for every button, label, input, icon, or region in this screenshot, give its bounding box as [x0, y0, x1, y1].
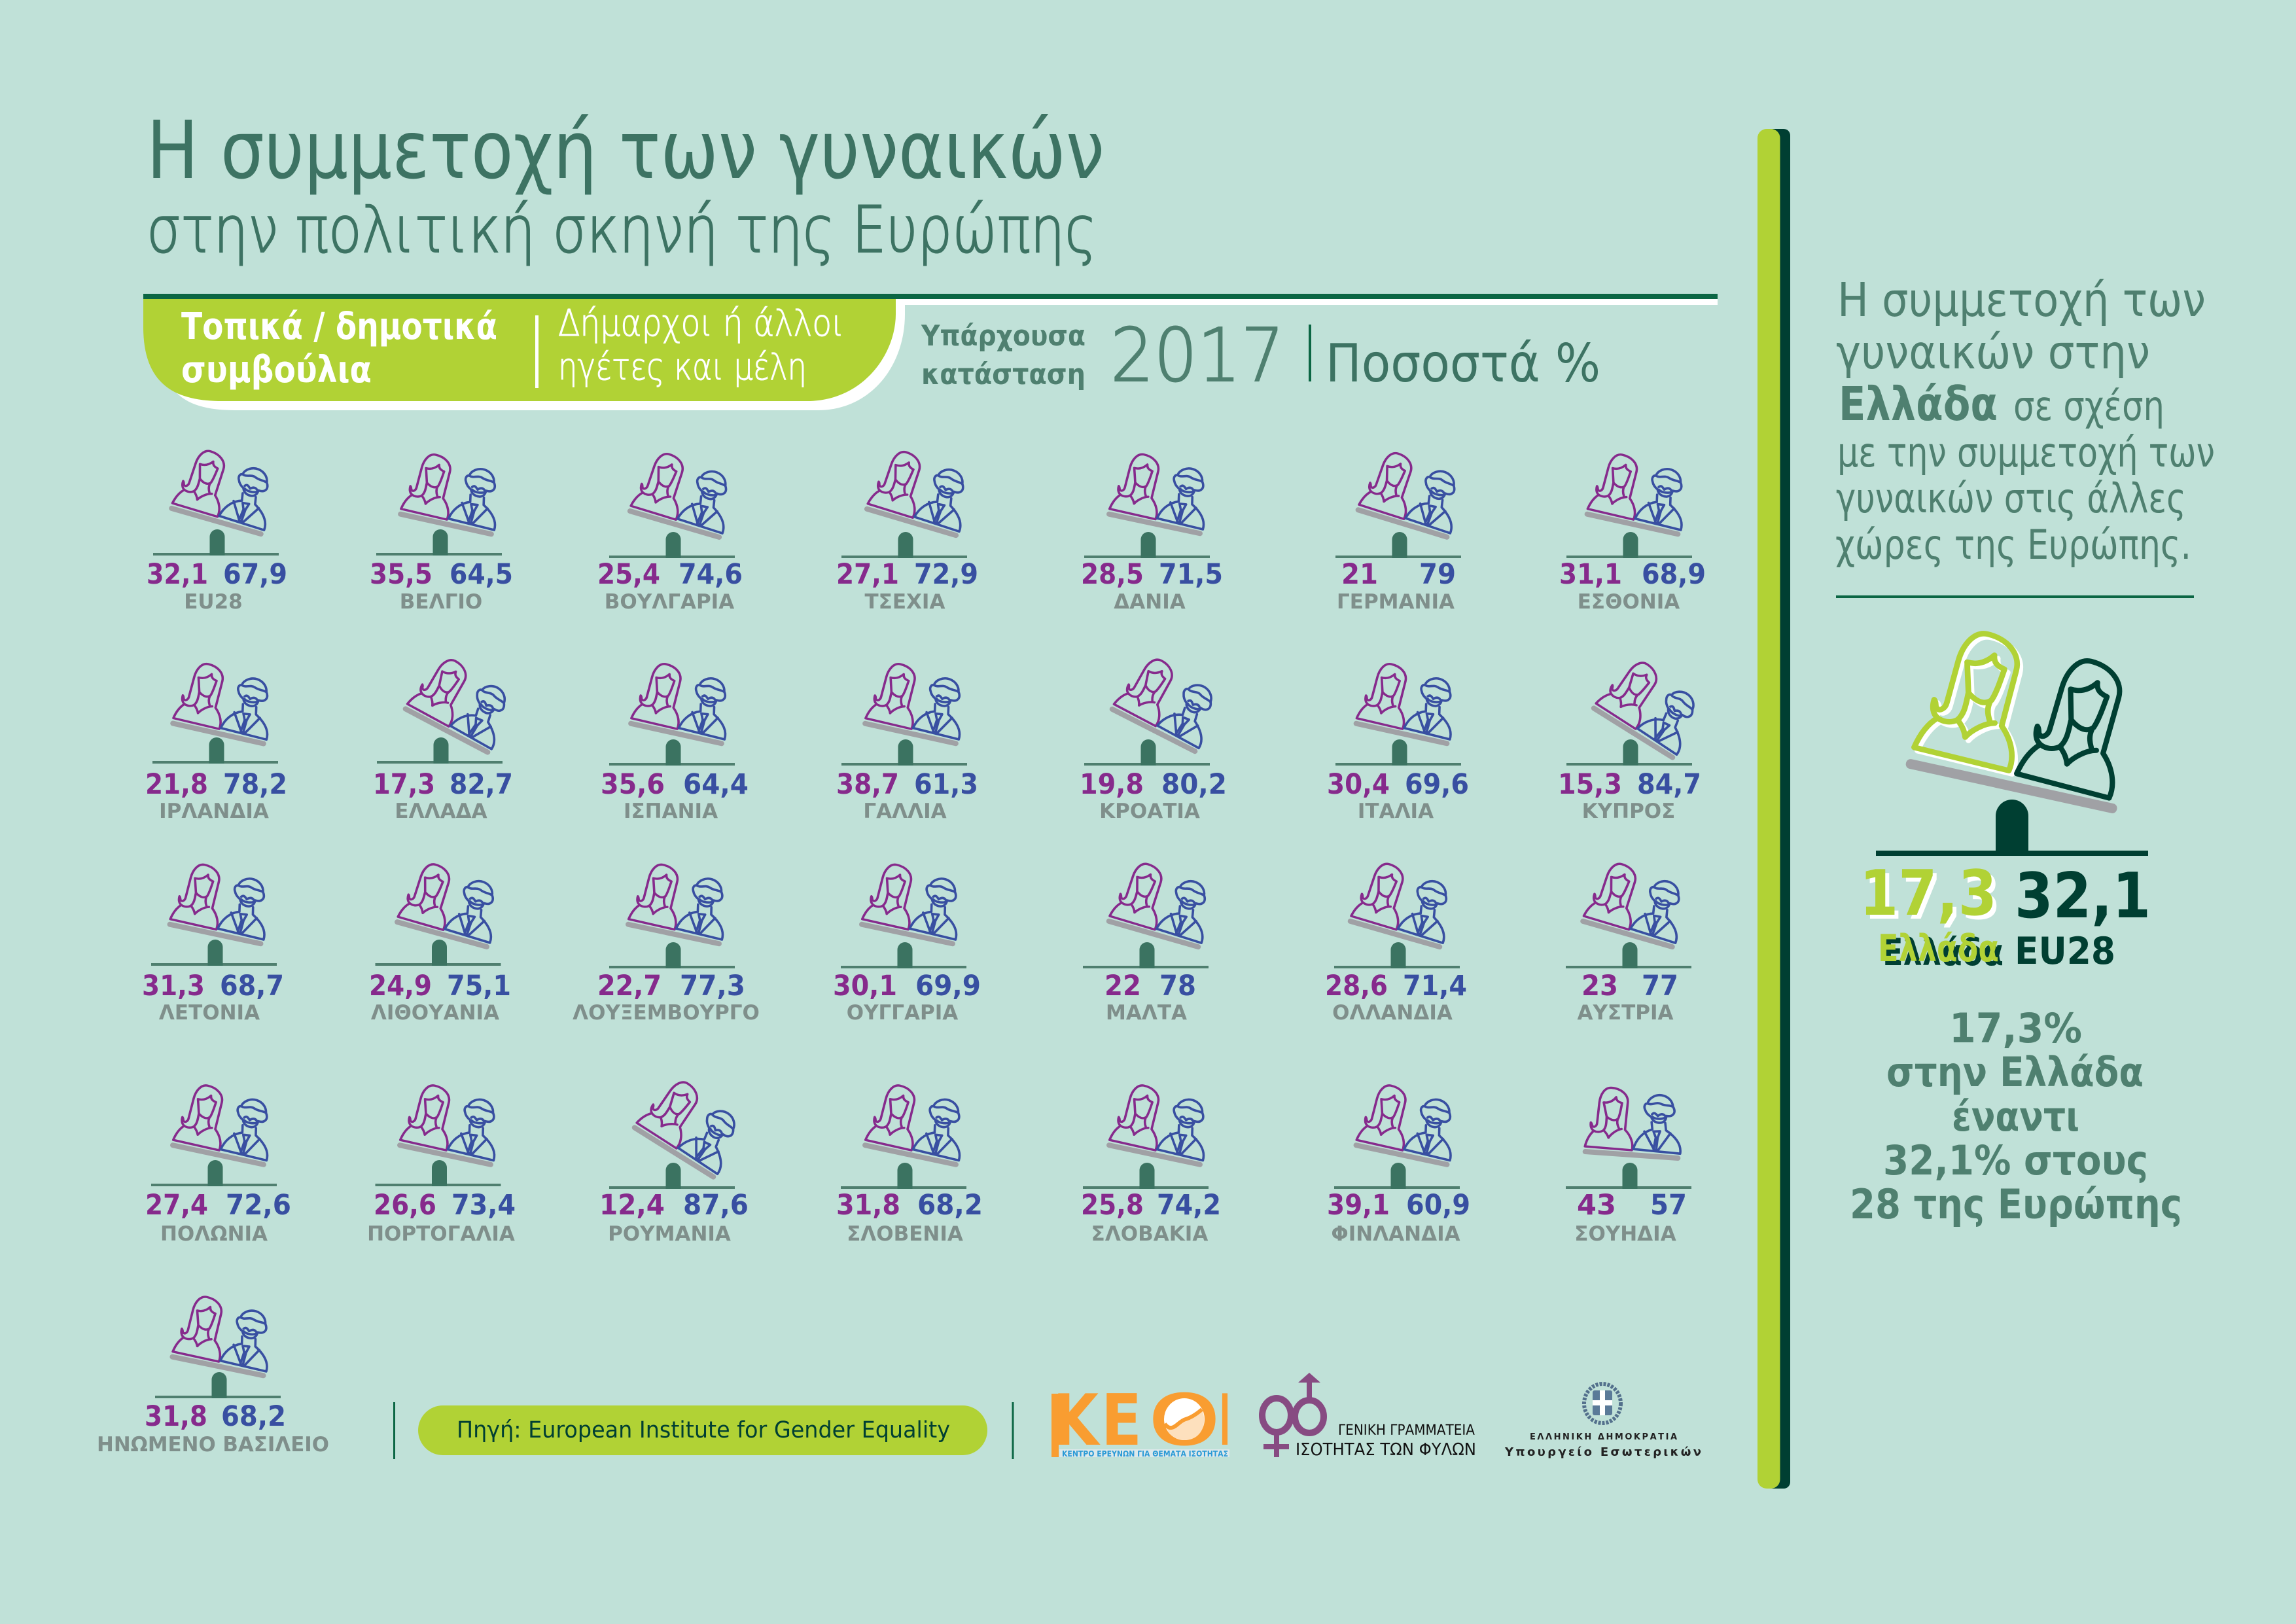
side panel: intro text: σε σχέση: [2013, 382, 2164, 430]
side panel: comparison numbers: 17,3: [1863, 862, 2001, 934]
country: Σουηδία: 57: [1650, 1189, 1687, 1222]
country: Δανία: [1081, 450, 1223, 614]
country: Λετονία: 68,7: [220, 970, 284, 1002]
side panel: comparison numbers: 32,1: [2015, 860, 2151, 932]
country: Ρουμανία: 87,6: [683, 1189, 749, 1222]
country: Γερμανία: [1335, 446, 1469, 614]
country: Λιθουανία: 75,1: [447, 970, 511, 1002]
side panel: intro text: με την συμμετοχή των: [1837, 429, 2215, 476]
logo: ΚΕΘΙ: ΚΕΝΤΡΟ ΕΡΕΥΝΩΝ ΓΙΑ ΘΕΜΑΤΑ ΙΣΟΤΗΤΑΣ: [1062, 1449, 1228, 1458]
logo: Γενική Γραμματεία Ισότητας των Φύλων: ΙΣΟΤΗΤΑΣ ΤΩΝ ΦΥΛΩΝ: [1296, 1440, 1476, 1460]
side panel: summary text: 17,3%: [1949, 1004, 2082, 1052]
country: Βέλγιο: 35,5: [370, 558, 433, 591]
country: Αυστρία: ΑΥΣΤΡΙΑ: [1577, 1001, 1674, 1025]
side panel: summary text: στην Ελλάδα: [1886, 1048, 2144, 1096]
country: Πολωνία: ΠΟΛΩΝΙΑ: [160, 1222, 268, 1246]
country: Λουξεμβούργο: ΛΟΥΞΕΜΒΟΥΡΓΟ: [573, 1001, 760, 1025]
country: Κροατία: 80,2: [1161, 768, 1227, 801]
country: EU28: [147, 445, 287, 614]
logo: Υπουργείο Εσωτερικών: [1504, 1384, 1701, 1459]
side panel: intro text: Η συμμετοχή των: [1837, 273, 2206, 327]
country: Κύπρος: 15,3: [1558, 768, 1622, 801]
category heading: [181, 302, 844, 391]
country: Πορτογαλία: [367, 1080, 516, 1246]
country: EU28: EU28: [184, 590, 243, 614]
country: Ηνωμένο Βασίλειο: ΗΝΩΜΕΝΟ ΒΑΣΙΛΕΙΟ: [97, 1433, 329, 1456]
country: Βέλγιο: [370, 450, 513, 614]
country: Ολλανδία: ΟΛΛΑΝΔΙΑ: [1332, 1001, 1453, 1025]
country: Βέλγιο: ΒΕΛΓΙΟ: [400, 590, 482, 614]
side panel: summary text: 32,1% στους: [1883, 1137, 2148, 1184]
country: Λουξεμβούργο: 22,7: [597, 970, 662, 1002]
country: Σλοβενία: 31,8: [836, 1189, 900, 1222]
country: Κύπρος: 84,7: [1637, 768, 1701, 801]
country: Φινλανδία: ΦΙΝΛΑΝΔΙΑ: [1331, 1222, 1460, 1246]
country: Λετονία: 31,3: [142, 970, 205, 1002]
country: Ιταλία: 69,6: [1405, 768, 1469, 801]
country: Σλοβακία: 25,8: [1081, 1189, 1144, 1222]
title: [147, 104, 1104, 268]
country: Ρουμανία: [599, 1070, 751, 1246]
country: Πορτογαλία: 26,6: [374, 1189, 436, 1222]
country: Σλοβενία: 68,2: [917, 1189, 983, 1222]
country: Κύπρος: ΚΥΠΡΟΣ: [1582, 800, 1675, 823]
country: Ουγγαρία: 69,9: [915, 970, 981, 1002]
country: Σουηδία: ΣΟΥΗΔΙΑ: [1574, 1222, 1676, 1246]
country: Λουξεμβούργο: [573, 860, 760, 1025]
country: Δανία: 28,5: [1081, 558, 1144, 591]
logo: Γενική Γραμματεία Ισότητας των Φύλων: ΓΕΝΙΚΗ ΓΡΑΜΜΑΤΕΙΑ: [1338, 1422, 1475, 1439]
side panel: intro text: γυναικών στις άλλες: [1836, 474, 2186, 522]
country: Αυστρία: [1566, 858, 1693, 1025]
country: Ιρλανδία: ΙΡΛΑΝΔΙΑ: [159, 800, 269, 823]
side panel: intro text: [1835, 273, 2215, 569]
country: Μάλτα: 22: [1104, 970, 1141, 1002]
year and percentage heading: κατάσταση: [921, 358, 1086, 391]
country: Εσθονία: 68,9: [1642, 558, 1706, 591]
country: Αυστρία: 23: [1581, 970, 1618, 1002]
country: Κροατία: 19,8: [1080, 768, 1144, 801]
country: Σλοβενία: ΣΛΟΒΕΝΙΑ: [847, 1222, 963, 1246]
country: Σλοβακία: ΣΛΟΒΑΚΙΑ: [1091, 1222, 1208, 1246]
country: Ελλάδα: [373, 650, 521, 823]
country: Λετονία: ΛΕΤΟΝΙΑ: [159, 1001, 260, 1025]
side panel: summary text: [1850, 1004, 2182, 1228]
country: EU28: 32,1: [147, 558, 208, 591]
logo: ΚΕΘΙ: Ε: [1101, 1380, 1142, 1462]
source pill: [393, 1402, 1014, 1459]
year and percentage heading: Ποσοστά %: [1326, 333, 1600, 394]
side panel: rule: [1836, 595, 2194, 598]
country: Σουηδία: [1566, 1086, 1691, 1246]
country: Ελλάδα: 82,7: [450, 768, 513, 801]
country: Ισπανία: ΙΣΠΑΝΙΑ: [624, 800, 718, 823]
country: Φινλανδία: [1327, 1080, 1470, 1246]
side panel: comparison numbers: 17,3: [1860, 858, 1997, 930]
country: Ιρλανδία: [145, 659, 287, 823]
country: Τσεχία: 27,1: [836, 558, 899, 591]
country: Λουξεμβούργο: 77,3: [680, 970, 745, 1002]
category heading: Τοπικά / δημοτικά: [181, 306, 497, 348]
country: Φινλανδία: 60,9: [1406, 1189, 1470, 1222]
country: Λετονία: [142, 860, 284, 1025]
logo: ΚΕΘΙ: Κ: [1053, 1380, 1101, 1462]
country: Ιταλία: 30,4: [1327, 768, 1390, 801]
country: Γαλλία: ΓΑΛΛΙΑ: [863, 800, 947, 823]
country: Ελλάδα: ΕΛΛΑΔΑ: [395, 800, 487, 823]
country: Σλοβενία: [836, 1080, 983, 1246]
country: Βουλγαρία: [597, 448, 743, 614]
category heading: Δήμαρχοι ή άλλοι: [558, 302, 844, 345]
country: Γαλλία: 61,3: [914, 768, 978, 801]
title: στην πολιτική σκηνή της Ευρώπης: [147, 193, 1097, 268]
country: Βέλγιο: 64,5: [450, 558, 513, 591]
country: Κροατία: [1080, 650, 1227, 823]
country: Μάλτα: [1083, 858, 1219, 1025]
country: Ηνωμένο Βασίλειο: 31,8: [145, 1400, 207, 1433]
country: Βουλγαρία: ΒΟΥΛΓΑΡΙΑ: [605, 590, 734, 614]
category heading: συμβούλια: [181, 349, 372, 391]
country: Γερμανία: 21: [1341, 558, 1378, 591]
country: Ιταλία: [1327, 659, 1469, 823]
country: Ολλανδία: 71,4: [1403, 970, 1467, 1002]
country: Γαλλία: 38,7: [836, 768, 899, 801]
country: Ισπανία: [601, 659, 749, 823]
logo: Γενική Γραμματεία Ισότητας των Φύλων: [1262, 1373, 1476, 1460]
country: Κύπρος: [1558, 651, 1710, 823]
country: Εσθονία: ΕΣΘΟΝΙΑ: [1578, 590, 1680, 614]
year and percentage heading: Υπάρχουσα: [921, 319, 1086, 353]
side panel: intro text: γυναικών στην: [1836, 325, 2150, 380]
country: Ηνωμένο Βασίλειο: 68,2: [221, 1400, 286, 1433]
country: Ιρλανδία: 78,2: [223, 768, 287, 801]
country: Ουγγαρία: 30,1: [833, 970, 897, 1002]
category heading: ηγέτες και μέλη: [558, 346, 807, 389]
country: Γερμανία: 79: [1419, 558, 1456, 591]
country: Ουγγαρία: [833, 860, 981, 1025]
side panel: comparison numbers: Ελλάδα: [1878, 927, 1999, 970]
country: Ιρλανδία: 21,8: [145, 768, 208, 801]
country: Βουλγαρία: 74,6: [679, 558, 743, 591]
side panel: summary text: 28 της Ευρώπης: [1850, 1180, 2182, 1228]
country: Πολωνία: 72,6: [226, 1189, 291, 1222]
logo: ΚΕΘΙ: Θ: [1149, 1380, 1220, 1462]
country: Σλοβακία: [1081, 1080, 1221, 1246]
country: Βουλγαρία: 25,4: [597, 558, 660, 591]
country: EU28: 67,9: [223, 558, 287, 591]
country: Τσεχία: [836, 446, 978, 614]
side panel: large scale icon: [1876, 624, 2148, 856]
header band: [143, 294, 1718, 410]
country: Ισπανία: 35,6: [601, 768, 665, 801]
country: Αυστρία: 77: [1642, 970, 1678, 1002]
country: Εσθονία: [1559, 450, 1706, 614]
country: Ιταλία: ΙΤΑΛΙΑ: [1358, 800, 1434, 823]
side panel: intro text: Ελλάδα: [1839, 377, 1998, 431]
country: Σλοβακία: 74,2: [1157, 1189, 1221, 1222]
country: Δανία: ΔΑΝΙΑ: [1114, 590, 1186, 614]
country: Κροατία: ΚΡΟΑΤΙΑ: [1099, 800, 1200, 823]
country: Σουηδία: 43: [1577, 1189, 1616, 1222]
country: Δανία: 71,5: [1159, 558, 1223, 591]
source pill: Πηγή: European Institute for Gender Equality: [457, 1417, 950, 1443]
logo: Υπουργείο Εσωτερικών: ΕΛΛΗΝΙΚΗ ΔΗΜΟΚΡΑΤΙΑ: [1530, 1432, 1677, 1442]
country: Πορτογαλία: 73,4: [451, 1189, 516, 1222]
country: Ολλανδία: [1325, 858, 1467, 1025]
country: Ολλανδία: 28,6: [1325, 970, 1388, 1002]
country: Ουγγαρία: ΟΥΓΓΑΡΙΑ: [847, 1001, 958, 1025]
country: Τσεχία: 72,9: [914, 558, 978, 591]
country: Λιθουανία: [369, 858, 511, 1025]
side panel: comparison numbers: EU28: [2015, 930, 2115, 973]
country: Ρουμανία: 12,4: [599, 1189, 665, 1222]
country: Τσεχία: ΤΣΕΧΙΑ: [865, 590, 945, 614]
side panel: intro text: χώρες της Ευρώπης.: [1835, 521, 2191, 569]
country: Μάλτα: 78: [1159, 970, 1196, 1002]
country: Ηνωμένο Βασίλειο: [97, 1292, 329, 1456]
country: Λιθουανία: 24,9: [369, 970, 432, 1002]
country: Πορτογαλία: ΠΟΡΤΟΓΑΛΙΑ: [367, 1222, 515, 1246]
country: Λιθουανία: ΛΙΘΟΥΑΝΙΑ: [371, 1001, 499, 1025]
country: Φινλανδία: 39,1: [1327, 1189, 1390, 1222]
country: Γαλλία: [836, 659, 978, 823]
country: Πολωνία: [145, 1080, 291, 1246]
country: Γερμανία: ΓΕΡΜΑΝΙΑ: [1337, 590, 1455, 614]
country: Ρουμανία: ΡΟΥΜΑΝΙΑ: [608, 1222, 731, 1246]
side panel: summary text: έναντι: [1952, 1093, 2079, 1140]
country: Εσθονία: 31,1: [1559, 558, 1622, 591]
country: Πολωνία: 27,4: [145, 1189, 208, 1222]
text: Ι: [1220, 1380, 1230, 1462]
country: Ισπανία: 64,4: [683, 768, 749, 801]
country: Ελλάδα: 17,3: [373, 768, 435, 801]
title: Η συμμετοχή των γυναικών: [147, 104, 1104, 197]
year and percentage heading: [921, 313, 1600, 398]
side panel: comparison numbers: [1860, 858, 2151, 974]
year and percentage heading: 2017: [1110, 313, 1284, 398]
side panel: comparison numbers: Ελλάδα: [1882, 931, 2004, 974]
vertical divider bar: [1757, 129, 1790, 1489]
logo: Υπουργείο Εσωτερικών: Υπουργείο Εσωτερικών: [1504, 1445, 1701, 1459]
logo: ΚΕΘΙ: [1051, 1380, 1230, 1462]
country: Μάλτα: ΜΑΛΤΑ: [1106, 1001, 1187, 1025]
